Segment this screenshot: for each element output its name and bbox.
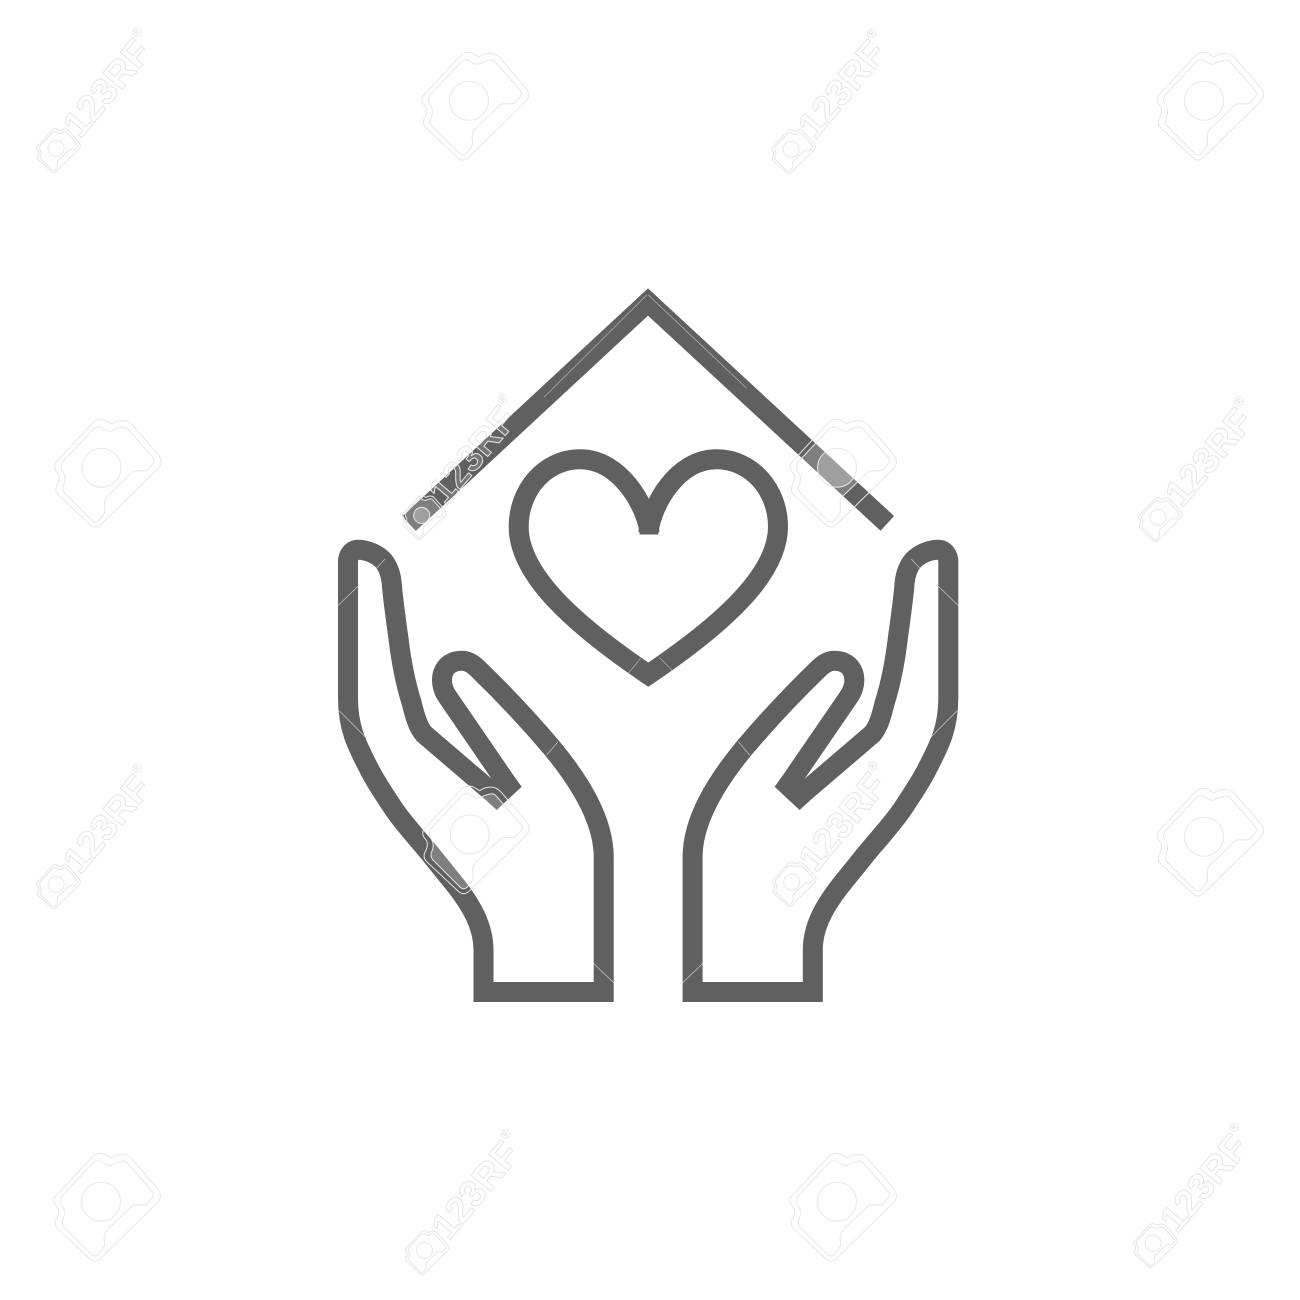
watermark: 123RF bottom center-left: ® — [497, 1125, 515, 1143]
watermark: 123RF top left: 123RF — [55, 32, 159, 145]
icon: right hand — [682, 550, 959, 992]
watermark: camera third row 1 — [423, 786, 529, 894]
watermark: 123RF on roof: ® — [494, 390, 512, 408]
watermark: 123RF bottom center-left: 123RF — [423, 1134, 527, 1247]
watermark: 123RF on roof — [402, 390, 532, 540]
watermark: 123RF bottom center-left — [405, 1125, 534, 1275]
watermark: 123RF top left: ® — [128, 23, 146, 41]
watermark: 123RF top center-right — [772, 24, 901, 174]
watermark: 123RF left third row — [37, 759, 166, 909]
watermark: 123RF top left — [37, 23, 166, 173]
watermark: 123RF bottom right: ® — [1225, 1118, 1243, 1136]
watermark: 123RF left third row: ® — [128, 759, 146, 777]
watermark: camera bottom row 1 — [54, 1153, 160, 1261]
watermark: camera third row 2 — [1157, 788, 1264, 896]
watermark: 123RF on right hand: 123RF — [791, 765, 895, 878]
watermark: 123RF right second row: 123RF — [1157, 401, 1261, 514]
watermark: 123RF on right hand — [772, 757, 902, 906]
watermark: camera top row 2 — [1157, 52, 1264, 160]
watermark: 123RF on roof: 123RF — [421, 399, 525, 512]
icon: heart — [519, 459, 778, 675]
watermark: 123RF on right hand: ® — [864, 757, 882, 774]
watermark: 123RF bottom right: 123RF — [1152, 1127, 1256, 1240]
watermark: 123RF right second row — [1139, 392, 1268, 542]
watermark: camera bottom row 2 — [790, 1153, 896, 1261]
icon: roof — [409, 295, 887, 524]
icon: left hand — [338, 550, 614, 992]
watermark: 123RF bottom right — [1134, 1118, 1263, 1268]
watermark: camera second row 1 — [54, 419, 161, 527]
watermark: 123RF top center-right: ® — [863, 24, 881, 42]
watermark: 123RF left third row: 123RF — [55, 768, 159, 881]
watermark: camera second row 2 — [790, 419, 896, 527]
watermark: 123RF right second row: ® — [1230, 392, 1248, 410]
watermark: camera top row 1 — [422, 52, 528, 160]
watermark: 123RF top center-right: 123RF — [790, 33, 894, 146]
